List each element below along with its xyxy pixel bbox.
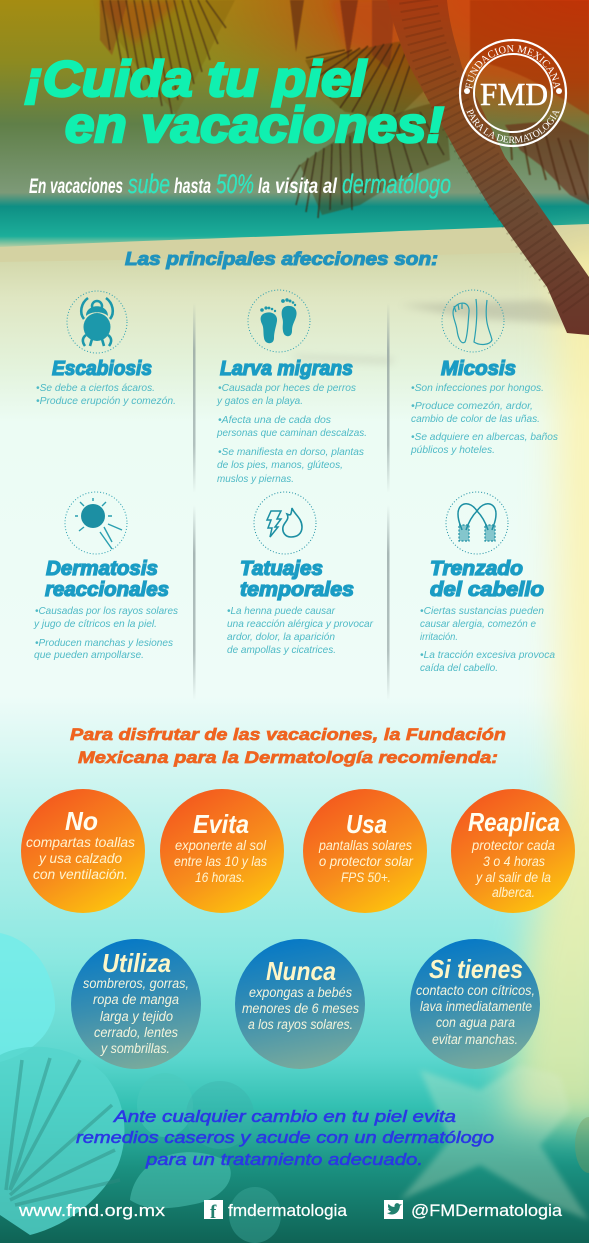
heading: Trenzado del cabello: Trenzado xyxy=(430,558,523,580)
closing message: Ante cualquier cambio en tu piel evita xyxy=(113,1108,456,1126)
text: Trenzado bullets xyxy=(420,605,555,674)
heading: Dermatosis reaccionales: Dermatosis xyxy=(46,558,158,580)
heading: recomendaciones: Para disfrutar de las vacaciones, la Fundación xyxy=(70,725,506,744)
circle: Reaplica: protector cada xyxy=(471,838,555,853)
circle: Utiliza xyxy=(71,939,201,1069)
logo: FMD seal: FUNDACION MEXICANA xyxy=(465,45,560,90)
circle: Reaplica: 3 o 4 horas xyxy=(483,854,545,869)
text: Larva migrans bullets: y gatos en la playa. xyxy=(216,395,303,407)
text: Escabiosis bullets: •Produce erupción y comezón. xyxy=(36,395,176,407)
title: ¡Cuida tu piel xyxy=(25,51,367,107)
panel: Escabiosis: Escabiosis xyxy=(52,358,152,380)
circle: Evita: exponerte al sol xyxy=(175,838,267,853)
text: Larva migrans bullets: •Afecta una de cada dos xyxy=(218,414,332,426)
circle: No: con ventilación. xyxy=(33,867,128,882)
text: Dermatosis bullets: •Causadas por los rayos solares xyxy=(35,605,179,617)
circle: Reaplica xyxy=(451,789,575,913)
heading: Tatuajes temporales: Tatuajes xyxy=(240,558,323,580)
palm tree xyxy=(100,0,589,335)
circle: Usa xyxy=(303,789,427,913)
closing message xyxy=(76,1108,494,1169)
logo: FMD seal: PARA LA DERMATOLOGIA xyxy=(466,108,560,144)
subtitle: visita al xyxy=(275,175,338,198)
text: Larva migrans bullets: •Se manifiesta en dorso, plantas xyxy=(218,446,365,458)
circle: Nunca: a los rayos solares. xyxy=(248,1017,353,1032)
title: en vacaciones! xyxy=(65,97,444,153)
footer: twitter: @FMDermatologia xyxy=(411,1201,563,1220)
footer: facebook: f xyxy=(210,1202,217,1223)
text: Tatuajes bullets: ardor, dolor, la aparición xyxy=(227,631,335,643)
closing message: para un tratamiento adecuado. xyxy=(145,1151,423,1169)
text: Tatuajes bullets: de ampollas y cicatrices. xyxy=(227,644,336,656)
text: Larva migrans bullets: muslos y piernas. xyxy=(217,473,294,485)
panel: Dermatosis reaccionales xyxy=(33,492,179,661)
circle: Reaplica: alberca. xyxy=(492,885,535,900)
heading: Tatuajes temporales: temporales xyxy=(240,579,354,601)
circle: Nunca: menores de 6 meses xyxy=(242,1001,359,1016)
heading: Trenzado del cabello xyxy=(430,558,544,601)
text: Micosis bullets: •Produce comezón, ardor, xyxy=(411,400,533,412)
panel: Escabiosis xyxy=(36,291,176,407)
text: Escabiosis bullets xyxy=(36,382,176,407)
circle: Utiliza: y sombrillas. xyxy=(100,1041,170,1056)
circle: Reaplica: y al salir de la xyxy=(475,870,551,885)
circle: Nunca: expongas a bebés xyxy=(249,985,352,1000)
circle: Utiliza: cerrado, lentes xyxy=(94,1025,178,1040)
text: Tatuajes bullets: •La henna puede causar xyxy=(227,605,335,617)
panel: Larva migrans: Larva migrans xyxy=(220,358,353,380)
text: Larva migrans bullets: de los pies, manos, glúteos, xyxy=(217,459,343,471)
subtitle: la xyxy=(258,175,270,198)
text: Dermatosis bullets xyxy=(33,605,179,661)
circle: Evita: Evita xyxy=(193,809,249,839)
circle: No xyxy=(21,789,145,913)
circle: Utiliza: larga y tejido xyxy=(100,1009,173,1024)
footer: website: www.fmd.org.mx xyxy=(18,1201,166,1220)
logo: FMD seal: FMD xyxy=(480,76,548,112)
footer: facebook: fmdermatologia xyxy=(228,1201,348,1220)
icon: mite xyxy=(67,291,127,353)
circle: No: No xyxy=(65,806,98,836)
logo: FMD seal xyxy=(458,38,568,148)
closing message: remedios caseros y acude con un dermatólogo xyxy=(76,1129,494,1147)
text: Micosis bullets: públicos y hoteles. xyxy=(410,444,495,456)
icon: lightning and flame xyxy=(254,492,316,554)
panel: Trenzado del cabello xyxy=(420,492,555,674)
text: Tatuajes bullets xyxy=(227,605,373,656)
heading: Tatuajes temporales xyxy=(240,558,354,601)
circle: Evita: entre las 10 y las xyxy=(174,854,267,869)
circle: No: compartas toallas xyxy=(26,835,135,850)
text: Dermatosis bullets: •Producen manchas y lesiones xyxy=(35,637,174,649)
heading: Trenzado del cabello: del cabello xyxy=(430,579,544,601)
circle: Si tienes: lava inmediatamente xyxy=(420,999,532,1014)
heading: Dermatosis reaccionales xyxy=(45,558,169,601)
heading: principales afecciones: Las principales afecciones son: xyxy=(125,248,438,269)
circle: Si tienes: con agua para xyxy=(436,1015,515,1030)
text: Micosis bullets xyxy=(410,382,559,456)
text: Larva migrans bullets: •Causada por heces de perros xyxy=(218,382,357,394)
text: Trenzado bullets: •La tracción excesiva provoca xyxy=(420,649,555,661)
text: Larva migrans bullets xyxy=(216,382,367,485)
heading: recomendaciones: Mexicana para la Dermatología recomienda: xyxy=(78,748,498,767)
circle: Evita xyxy=(160,789,284,913)
circle: Usa: pantallas solares xyxy=(318,838,412,853)
panel: Larva migrans xyxy=(216,290,367,485)
circle: Usa: o protector solar xyxy=(319,854,413,869)
icon: braids xyxy=(446,492,508,554)
subtitle: sube xyxy=(128,169,170,199)
circle: Si tienes: contacto con cítricos, xyxy=(416,983,535,998)
subtitle: hasta xyxy=(174,175,211,198)
text: Escabiosis bullets: •Se debe a ciertos ácaros. xyxy=(36,382,155,394)
shells at the bottom xyxy=(0,933,589,1243)
subtitle: En vacaciones xyxy=(29,175,123,198)
panel: Micosis: Micosis xyxy=(441,358,516,380)
circle: Nunca: Nunca xyxy=(266,956,336,986)
heading: recomendaciones xyxy=(70,725,506,767)
text: Trenzado bullets: causar alergia, comezón e xyxy=(420,618,536,630)
subtitle xyxy=(29,169,451,199)
panel: Micosis xyxy=(410,290,559,456)
text: Trenzado bullets: •Ciertas sustancias pueden xyxy=(420,605,544,617)
text: Micosis bullets: cambio de color de las uñas. xyxy=(411,413,540,425)
circle: Utiliza: sombreros, gorras, xyxy=(83,976,189,991)
circle: Si tienes xyxy=(410,939,540,1069)
subtitle: 50% xyxy=(216,169,254,199)
circle: Usa: Usa xyxy=(346,809,387,839)
circle: Si tienes: Si tienes xyxy=(429,954,523,984)
text: Tatuajes bullets: una reacción alérgica y provocar xyxy=(227,618,373,630)
subtitle: dermatólogo xyxy=(342,169,451,199)
circle: Utiliza: Utiliza xyxy=(102,948,171,978)
panel: Tatuajes temporales xyxy=(227,492,373,656)
text: Larva migrans bullets: personas que caminan descalzas. xyxy=(216,427,367,439)
text: Dermatosis bullets: y jugo de cítricos en la piel. xyxy=(33,618,157,630)
circle: Evita: 16 horas. xyxy=(195,870,245,885)
icon: foot outlines xyxy=(442,290,504,352)
footer: facebook xyxy=(204,1200,348,1223)
text: Micosis bullets: •Son infecciones por hongos. xyxy=(411,382,544,394)
circle: Utiliza: ropa de manga xyxy=(93,992,179,1007)
circle: Si tienes: evitar manchas. xyxy=(432,1032,518,1047)
circle: Usa: FPS 50+. xyxy=(341,870,391,885)
heading: Dermatosis reaccionales: reaccionales xyxy=(45,579,169,601)
text: Micosis bullets: •Se adquiere en albercas, baños xyxy=(411,431,559,443)
icon: footprints xyxy=(248,290,310,352)
circle: Reaplica: Reaplica xyxy=(468,807,560,837)
icon: sun xyxy=(65,492,127,554)
circle: No: y usa calzado xyxy=(38,851,122,866)
text: Trenzado bullets: irritación. xyxy=(420,631,458,643)
circle: Nunca xyxy=(235,939,365,1069)
text: Trenzado bullets: caída del cabello. xyxy=(420,662,498,674)
title xyxy=(25,51,444,153)
text: Dermatosis bullets: que pueden ampollarse. xyxy=(34,649,144,661)
